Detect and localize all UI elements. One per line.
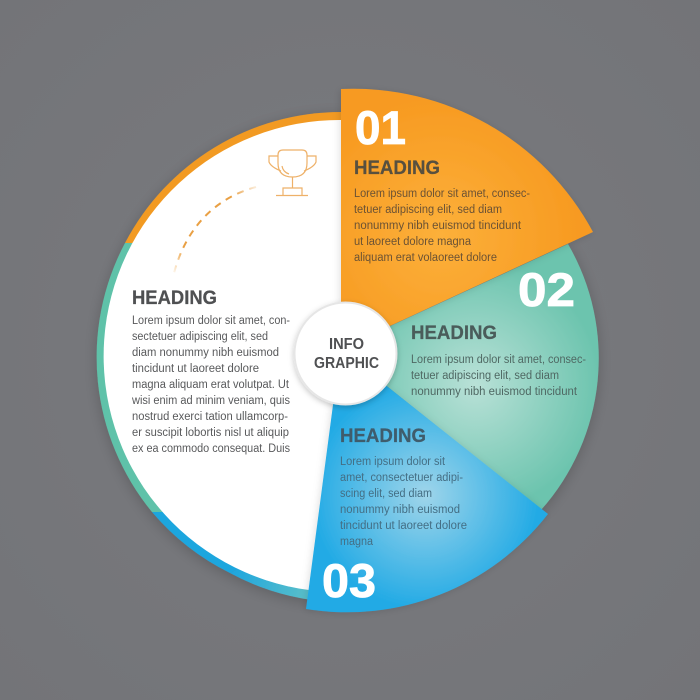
body text: left section: nostrud exerci tation ullamcorp- (132, 411, 288, 423)
center label: GRAPHIC (314, 355, 379, 372)
body text: section 01: nonummy nibh euismod tincidunt (354, 220, 522, 232)
body text: left section: wisi enim ad minim veniam, quis (131, 395, 290, 407)
panel: 03 blue section (306, 352, 548, 612)
body text: section 02 (411, 354, 586, 398)
text block: section 02 (411, 322, 586, 398)
body text: section 01: tetuer adipiscing elit, sed diam (354, 204, 502, 216)
body text: left section: tincidunt ut laoreet dolore (132, 363, 259, 375)
outer ring: orange, teal and blue arcs (97, 112, 345, 600)
body text: section 01: aliquam erat volaoreet dolore (354, 252, 497, 264)
center badge (294, 302, 396, 404)
heading: section 02: HEADING (411, 322, 497, 344)
body text: section 03: amet, consectetuer adipi- (340, 472, 463, 484)
text block: left section (131, 287, 290, 455)
body text: section 03 (340, 456, 467, 548)
body text: left section: Lorem ipsum dolor sit amet, con- (132, 315, 290, 327)
heading: left section: HEADING (132, 287, 217, 309)
body text: section 01: ut laoreet dolore magna (354, 236, 472, 248)
body text: section 02: tetuer adipiscing elit, sed diam (411, 370, 559, 382)
center circle (294, 302, 396, 404)
body text: left section: sectetuer adipiscing elit, sed (132, 331, 268, 343)
number 01: 01 (355, 101, 406, 154)
heading: section 03: HEADING (340, 425, 426, 447)
body text: left section (131, 315, 290, 455)
panel: 01 orange section (341, 89, 593, 349)
body text: section 03: scing elit, sed diam (340, 488, 432, 500)
body text: left section: diam nonummy nibh euismod (132, 347, 279, 359)
panel: left white section (104, 120, 345, 590)
body text: section 01: Lorem ipsum dolor sit amet, consec- (354, 188, 530, 200)
body text: left section: ex ea commodo consequat. Duis (132, 443, 290, 455)
infographic wheel (97, 89, 599, 612)
number 03: 03 (322, 554, 376, 607)
body text: left section: er suscipit lobortis nisl ut aliquip (132, 427, 289, 439)
heading: section 01: HEADING (354, 157, 440, 179)
body text: section 02: Lorem ipsum dolor sit amet, consec- (411, 354, 586, 366)
body text: section 02: nonummy nibh euismod tincidunt (411, 386, 578, 398)
center label: INFO (329, 336, 364, 353)
text block: section 03 (340, 425, 467, 548)
dashed arc path (174, 187, 256, 273)
body text: section 03: tincidunt ut laoreet dolore (340, 520, 467, 532)
center label (314, 336, 379, 372)
body text: section 03: Lorem ipsum dolor sit (340, 456, 446, 468)
body text: left section: magna aliquam erat volutpat. Ut (132, 379, 290, 391)
panel: 02 teal section (345, 244, 599, 510)
body text: section 03: nonummy nibh euismod (340, 504, 460, 516)
body text: section 01 (354, 188, 530, 264)
body text: section 03: magna (340, 536, 374, 548)
icon: trophy (269, 150, 316, 196)
text block: section 01 (354, 157, 530, 264)
number 02: 02 (518, 263, 575, 316)
